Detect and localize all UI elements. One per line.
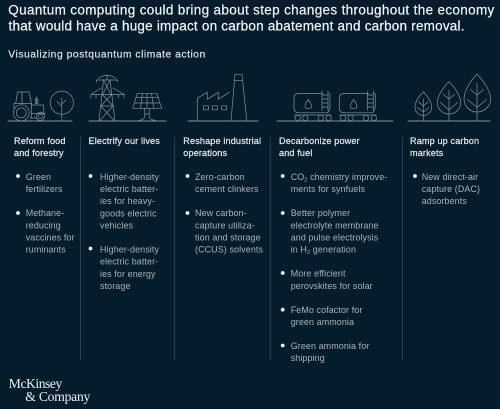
icon: factory	[188, 74, 258, 121]
bullet: CCUS solvents: (CCUS) solvents	[195, 244, 263, 254]
bullet: batteries for energy storage: Higher-density	[100, 245, 159, 255]
heading: ramp up carbon markets	[410, 136, 479, 158]
bullet: CO2 chemistry: 2	[304, 178, 308, 184]
bullet: methane-reducing vaccines	[16, 208, 75, 254]
bullet: DAC adsorbents: adsorbents	[422, 196, 467, 206]
bullet: methane-reducing vaccines: ruminants	[26, 244, 66, 254]
heading: reform food and forestry: Reform food	[14, 136, 66, 146]
heading: electrify our lives: Electrify our lives	[88, 136, 160, 146]
column: decarbonize power and fuel	[279, 136, 387, 363]
bullet: batteries for heavy-goods vehicles	[89, 172, 159, 230]
bullet: DAC adsorbents: capture (DAC)	[422, 184, 480, 194]
icon: tractor and tree	[8, 91, 73, 121]
heading: reshape industrial operations: operations	[183, 148, 227, 158]
bullet: batteries for energy storage: storage	[100, 281, 131, 291]
bullet: polymer electrolyte membrane: generation	[310, 244, 356, 254]
bullet: green ammonia for shipping: shipping	[291, 353, 325, 363]
bullet: green fertilizers: fertilizers	[26, 184, 63, 194]
bullet: polymer electrolyte membrane: electrolyte membrane	[291, 220, 379, 230]
bullet: batteries for heavy-goods vehicles: Higher-density	[100, 172, 159, 182]
heading: reshape industrial operations	[183, 136, 261, 158]
column: reform food and forestry	[14, 136, 75, 254]
column: ramp up carbon markets	[410, 136, 480, 206]
bullet: CO2 chemistry: chemistry improve-	[308, 172, 387, 182]
logo: McKinsey & Company: McKinsey	[9, 376, 63, 391]
bullet: CCUS solvents	[186, 208, 263, 254]
bullet: methane-reducing vaccines: vaccines for	[26, 232, 75, 242]
bullet: batteries for heavy-goods vehicles: vehicles	[100, 220, 134, 230]
bullet: methane-reducing vaccines: reducing	[26, 220, 61, 230]
bullet: DAC adsorbents	[413, 172, 480, 206]
column: electrify our lives	[88, 136, 160, 291]
bullet: green ammonia for shipping	[281, 341, 369, 363]
bullet: CCUS solvents: capture utiliza-	[195, 220, 255, 230]
bullet: perovskites	[281, 269, 373, 291]
bullet: CCUS solvents: tion and storage	[195, 232, 261, 242]
bullet: perovskites: More efficient	[291, 269, 346, 279]
heading: reshape industrial operations: Reshape industrial	[183, 136, 261, 146]
bullet: polymer electrolyte membrane	[281, 208, 379, 256]
bullet: green fertilizers: Green	[26, 172, 51, 182]
bullet: polymer electrolyte membrane: and pulse electrolysis	[291, 232, 379, 242]
bullet: FeMo cofactor	[281, 305, 362, 327]
heading: decarbonize power and fuel	[279, 136, 360, 158]
heading: reform food and forestry	[14, 136, 66, 158]
bullet: DAC adsorbents: New direct-air	[422, 172, 478, 182]
bullet: batteries for heavy-goods vehicles: ies for heavy-	[100, 196, 155, 206]
logo: McKinsey & Company	[9, 376, 91, 404]
title: Quantum computing could bring about step changes throughout the economy	[8, 2, 495, 17]
column: reshape industrial operations	[183, 136, 263, 254]
heading: ramp up carbon markets: Ramp up carbon	[410, 136, 479, 146]
heading: reform food and forestry: and forestry	[14, 148, 64, 158]
icon: tanker train cars	[277, 91, 393, 121]
title: that would have a huge impact on carbon abatement and carbon removal.	[8, 18, 464, 33]
bullet: zero-carbon cement clinkers: cement clinkers	[195, 184, 259, 194]
bullet: zero-carbon cement clinkers	[186, 172, 259, 194]
bullet: green fertilizers	[16, 172, 63, 194]
bullet: zero-carbon cement clinkers: Zero-carbon	[195, 172, 245, 182]
bullet: methane-reducing vaccines: Methane-	[26, 208, 64, 218]
bullet: CCUS solvents: New carbon-	[195, 208, 247, 218]
subtitle: Visualizing postquantum climate action	[8, 50, 206, 60]
bullet: polymer electrolyte membrane: Better polymer	[291, 208, 350, 218]
bullet: green ammonia for shipping: Green ammonia for	[291, 341, 369, 351]
bullet: batteries for energy storage: electric batter-	[100, 257, 158, 267]
bullet: batteries for energy storage: ies for energy	[100, 269, 156, 279]
heading: decarbonize power and fuel: Decarbonize power	[279, 136, 360, 146]
bullet: FeMo cofactor: green ammonia	[291, 317, 354, 327]
bullet: CO2 chemistry: CO	[291, 172, 304, 182]
bullet: CO2 chemistry: ments for synfuels	[291, 184, 365, 194]
column dividers	[80, 137, 402, 360]
bullet: batteries for heavy-goods vehicles: electric batter-	[100, 184, 158, 194]
bullet: perovskites: perovskites for solar	[291, 281, 373, 291]
bullet: FeMo cofactor: FeMo cofactor for	[291, 305, 362, 315]
title	[8, 2, 495, 33]
bullet: CO2 chemistry	[281, 172, 387, 194]
icon: pylon and solar panel	[89, 75, 166, 121]
heading: ramp up carbon markets: markets	[410, 148, 444, 158]
heading: decarbonize power and fuel: and fuel	[279, 148, 312, 158]
bullet: polymer electrolyte membrane: in H	[291, 244, 307, 254]
icon: three trees	[408, 74, 491, 121]
bullet: batteries for heavy-goods vehicles: goods electric	[100, 208, 157, 218]
logo: McKinsey & Company: & Company	[25, 389, 91, 404]
bullet: batteries for energy storage	[89, 245, 159, 291]
bullet: polymer electrolyte membrane: 2	[307, 250, 310, 256]
